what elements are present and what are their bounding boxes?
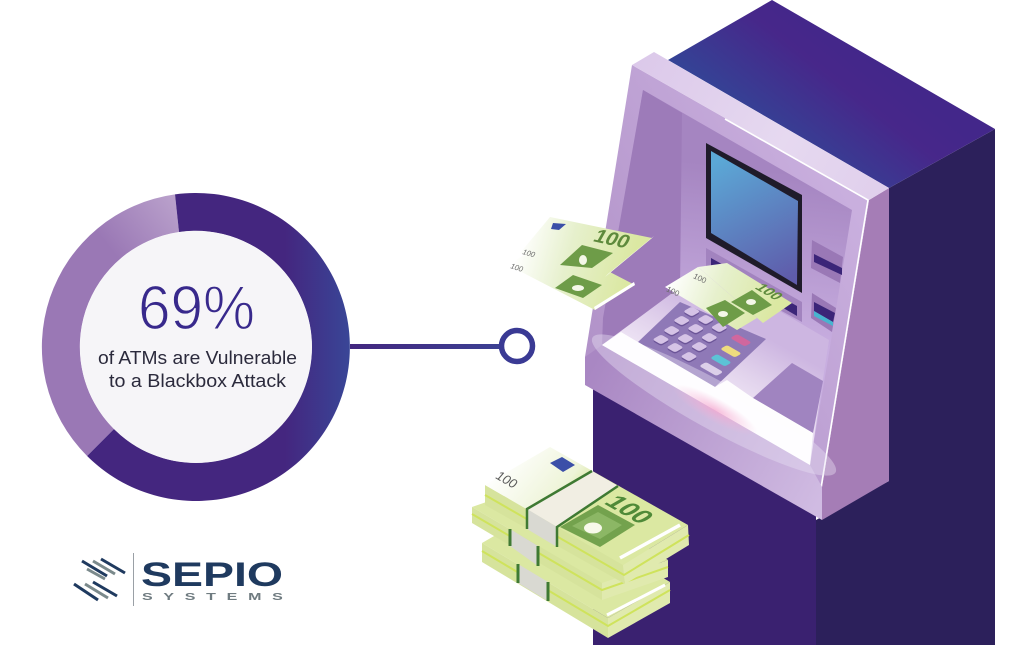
EU flag [550,457,575,472]
bills in slot: 100 [665,284,681,299]
ATM front frame [585,65,869,487]
card slot lower [811,293,836,332]
bill captions: 100 [692,271,708,286]
top stack face [485,447,688,565]
ATM top frame strip [632,52,889,200]
wordmark: SEPIO [141,556,283,594]
caption: to a Blackbox Attack [109,370,287,391]
centre disc [80,231,312,463]
glass reflection [581,317,847,493]
bill window back [731,290,772,315]
shelf [602,268,829,465]
denomination: 100 [598,491,661,528]
Sepio Systems logo [74,553,283,606]
upper bill: 100 [590,226,634,253]
logo divider [133,553,134,606]
top stack sides [485,485,625,584]
hand rest [753,363,823,433]
ATM top face [668,0,995,188]
caption: of ATMs are Vulnerable [98,347,297,368]
caption [98,347,297,391]
denomination caption: 100 [493,468,520,492]
cash stacks [472,447,689,638]
function key red [730,334,752,346]
frame highlight [725,119,868,488]
upper bill: 100 [521,247,537,259]
banknote window inner [572,512,622,539]
recess left shaded wall [602,90,682,345]
screen bezel [706,143,802,293]
window glints [746,299,756,305]
bottom stack [482,507,670,638]
ATM dark side [816,129,995,645]
card slot upper [811,240,843,283]
ring segment: 69% [87,193,350,501]
big number: 69% [138,274,255,343]
banknote window [560,505,635,547]
white front of shelf [602,332,813,465]
cash slot [706,248,802,322]
connector line with ring end [350,330,532,362]
back bill [698,263,792,323]
upper bill [520,217,654,277]
keypad [638,302,766,387]
band front [527,509,557,547]
ring segment: remaining 31% [42,194,179,456]
lower bill: 100 [509,261,525,274]
recess panel [602,90,852,465]
ATM machine [581,0,995,645]
ATM purple side panel [822,188,889,520]
glow on shelf [667,376,763,444]
floating bills [508,217,654,310]
bill denomination: 100 [751,281,787,303]
lower bill [508,240,635,310]
window glint [584,522,602,534]
middle stack [472,484,668,600]
paper band [527,471,618,527]
front bill [665,267,757,330]
shelf lip [585,345,822,520]
band edges [527,471,618,547]
bills in slot [665,263,792,330]
logo mark [74,559,125,600]
top stack [485,447,689,584]
function key yellow [720,345,742,358]
ATM lower body [593,385,816,645]
function key white [699,362,723,376]
function key cyan [710,354,732,366]
top stack highlight [620,525,680,558]
screen [711,151,798,285]
donut chart: 69% [42,193,350,501]
bill window front [706,300,745,327]
tagline: SYSTEMS [142,591,283,602]
